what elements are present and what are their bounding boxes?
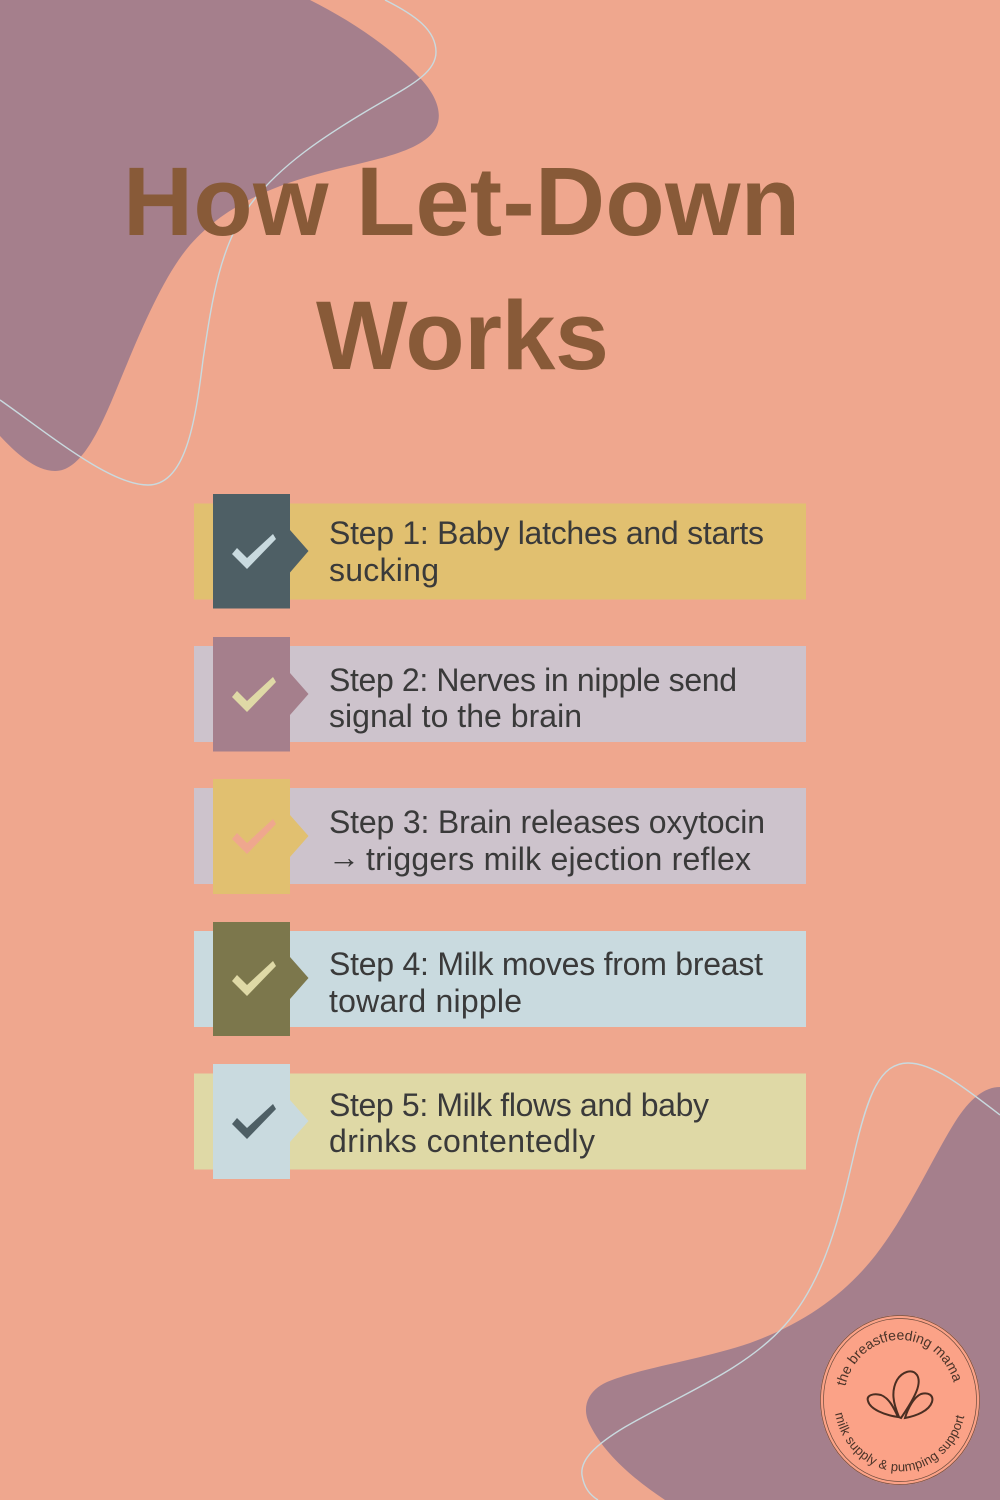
title: Works bbox=[316, 281, 609, 390]
decorative line: top left bbox=[0, 0, 436, 485]
logo badge bbox=[820, 1315, 980, 1485]
step 4: Step 4: Milk moves from breast bbox=[329, 946, 763, 982]
title bbox=[123, 147, 800, 390]
title: How Let-Down bbox=[123, 147, 800, 256]
step 3: triggers milk ejection reflex bbox=[366, 841, 751, 877]
logo bottom text: milk supply & pumping support bbox=[835, 1412, 964, 1474]
logo top text: the breastfeeding mama bbox=[836, 1330, 960, 1386]
step 2: signal to the brain bbox=[329, 698, 582, 734]
step 2 bbox=[194, 637, 806, 752]
blob: top left bbox=[0, 0, 439, 471]
step 4: toward nipple bbox=[329, 983, 522, 1019]
step 5 bbox=[194, 1064, 806, 1179]
step 3: → bbox=[328, 839, 360, 875]
step 1: sucking bbox=[329, 552, 439, 588]
step 1 bbox=[194, 494, 806, 608]
blob: bottom right bbox=[586, 1087, 1000, 1500]
icon: flower bbox=[868, 1371, 932, 1418]
decorative line: bottom right bbox=[582, 1063, 1000, 1500]
step 3: Step 3: Brain releases oxytocin bbox=[329, 804, 765, 840]
step 2: Step 2: Nerves in nipple send bbox=[329, 662, 737, 698]
step 5: Step 5: Milk flows and baby bbox=[329, 1087, 709, 1123]
step 1: Step 1: Baby latches and starts bbox=[329, 515, 764, 551]
step 4 bbox=[194, 922, 806, 1036]
step 3 bbox=[194, 779, 806, 894]
step 5: drinks contentedly bbox=[329, 1123, 595, 1159]
